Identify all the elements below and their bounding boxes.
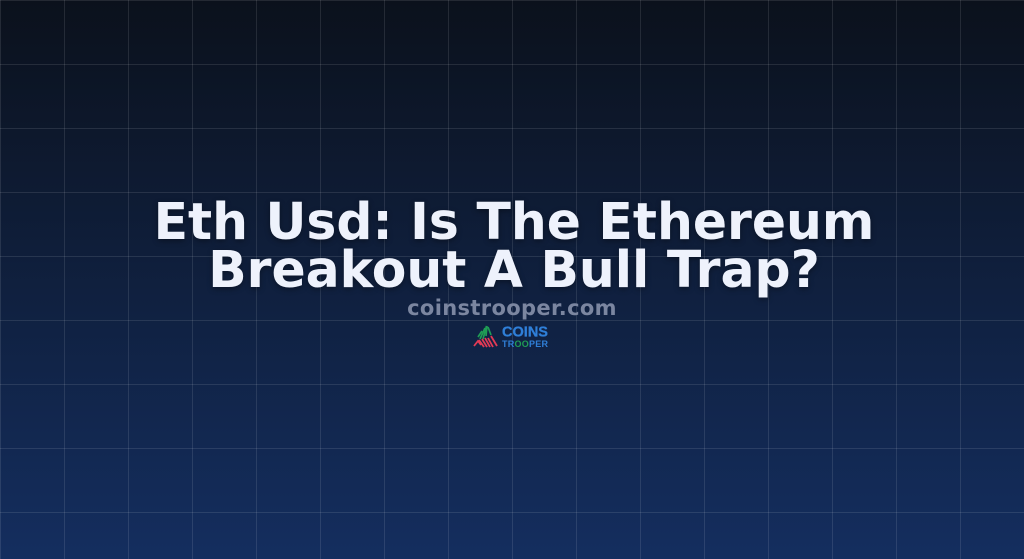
icon: green peak stripes: [478, 326, 491, 339]
logo word: COINS: COINS: [502, 324, 548, 340]
logo word: TROOPER: TROOPER: [502, 339, 548, 349]
logo: Coins Trooper: [473, 324, 548, 349]
title: Breakout A Bull Trap?: [208, 240, 820, 299]
title: [154, 192, 874, 300]
site name: coinstrooper.com: [407, 296, 617, 320]
icon: red chart stripes: [474, 336, 497, 347]
title: Eth Usd: Is The Ethereum: [154, 192, 874, 251]
